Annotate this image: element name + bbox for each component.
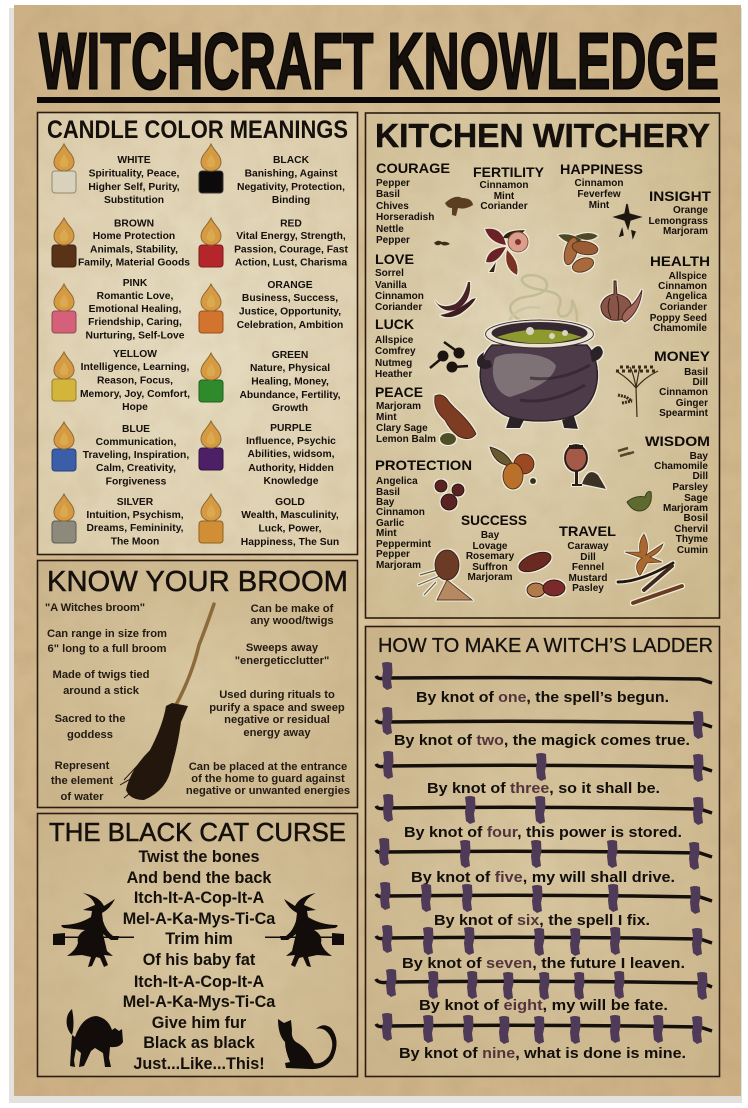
list: money: Dill <box>692 377 708 388</box>
text: broom right notes: Can be placed at the entrance <box>189 761 347 773</box>
text: curse verse: Just...Like...This! <box>133 1055 265 1073</box>
list: travel: Fennel <box>572 562 604 573</box>
list: luck: Comfrey <box>375 346 416 357</box>
text: curse verse: Itch-It-A-Cop-It-A <box>134 889 264 907</box>
text: broom right notes <box>186 603 350 797</box>
list: love: Cinnamon <box>375 291 424 302</box>
list: love: Coriander <box>375 302 422 313</box>
icon: ginger root <box>445 197 473 216</box>
list: travel <box>559 523 616 594</box>
list: happiness: HAPPINESS <box>560 161 643 177</box>
list: peace: Marjoram <box>376 401 421 412</box>
list: insight <box>649 188 711 237</box>
candle: white <box>52 144 76 193</box>
list: fertility <box>473 164 545 212</box>
ladder row 9 <box>376 1013 712 1062</box>
list: wisdom: Bay <box>690 451 708 462</box>
icon: small seeds wisdom <box>618 448 634 456</box>
list: success: Lovage <box>472 541 508 552</box>
text: curse verse: Twist the bones <box>138 848 260 866</box>
text: broom right notes: "energeticclutter" <box>235 655 329 667</box>
list: health: HEALTH <box>650 253 710 269</box>
list: protection: Garlic <box>376 518 405 529</box>
icon: vanilla and cinnamon sticks <box>618 563 682 603</box>
ladder row 3 <box>376 751 712 797</box>
text: green: Growth <box>272 403 308 414</box>
icon: dill umbel <box>616 367 658 417</box>
text: pink: Romantic Love, <box>97 291 173 302</box>
candle: red <box>199 218 223 267</box>
candle: yellow <box>52 352 76 401</box>
text: red: Passion, Courage, Fast <box>234 244 349 256</box>
ladder row 6 <box>376 882 712 929</box>
list: health: Coriander <box>660 302 707 313</box>
list: luck <box>375 316 416 380</box>
list: love: LOVE <box>375 251 414 267</box>
list: courage: Horseradish <box>376 212 434 223</box>
icon: almonds <box>558 233 599 275</box>
list: protection: Pepper <box>376 549 410 560</box>
list: wisdom: Chamomile <box>654 461 708 472</box>
list: success: Rosemary <box>466 551 515 562</box>
heading: kitchen witchery: KITCHEN WITCHERY <box>375 117 710 154</box>
list: love <box>375 251 424 313</box>
text: orange: ORANGE <box>267 280 313 291</box>
text: curse verse: Trim him <box>165 930 233 948</box>
text: silver: Dreams, Femininity, <box>86 523 184 534</box>
ladder row 8: By knot of eight, my will be fate. <box>419 997 668 1014</box>
list: protection: Basil <box>376 487 400 498</box>
list: peace: Mint <box>376 412 397 423</box>
list: happiness: Cinnamon <box>575 178 623 189</box>
list: wisdom: Cumin <box>677 545 708 556</box>
icon: hazelnuts <box>435 480 464 510</box>
list: fertility: FERTILITY <box>473 164 545 180</box>
list: insight: Marjoram <box>663 226 708 237</box>
panel: kitchen witchery <box>366 113 720 618</box>
list: wisdom: Bosil <box>684 513 708 524</box>
list: money: Ginger <box>676 398 708 409</box>
list: protection: Mint <box>376 528 397 539</box>
icon: witch on broom left <box>53 893 134 967</box>
list: protection: PROTECTION <box>375 457 472 473</box>
list: luck: Heather <box>375 369 412 380</box>
text: red: Action, Lust, Charisma <box>235 258 347 268</box>
ladder row 1 <box>376 662 712 706</box>
text: orange: Celebration, Ambition <box>237 320 343 331</box>
text: brown: Family, Material Goods <box>78 258 190 268</box>
ladder row 4: By knot of four, this power is stored. <box>404 824 682 841</box>
list: health: Allspice <box>669 271 707 282</box>
text: white: Substitution <box>104 195 164 206</box>
text: white: Higher Self, Purity, <box>88 182 180 193</box>
ladder row 5 <box>376 838 712 886</box>
text: green: GREEN <box>272 350 308 361</box>
list: courage: Basil <box>376 189 400 200</box>
icon: sitting black cat <box>278 1019 337 1069</box>
text: broom left notes: the element <box>51 775 113 787</box>
icon: witch on broom right <box>265 893 344 967</box>
list: health: Cinnamon <box>658 281 707 292</box>
list: peace: Clary Sage <box>376 423 428 434</box>
text: curse verse: Itch-It-A-Cop-It-A <box>134 973 264 991</box>
ladder row 2: By knot of two, the magick comes true. <box>394 732 690 749</box>
text: black: BLACK <box>273 155 310 166</box>
text: broom right notes: negative or unwanted energies <box>186 785 350 797</box>
list: travel: Caraway <box>567 541 609 552</box>
text: orange: Justice, Opportunity, <box>239 306 341 318</box>
text: pink: PINK <box>123 278 148 289</box>
list: wisdom: Dill <box>692 471 708 482</box>
list: money: Basil <box>684 367 708 378</box>
icon: garlic <box>601 281 642 322</box>
text: curse verse: Black as black <box>143 1034 256 1052</box>
text: curse verse: Mel-A-Ka-Mys-Ti-Ca <box>123 993 276 1011</box>
list: money: Spearmint <box>659 408 709 419</box>
list: travel: Mustard <box>569 573 607 584</box>
panel: know your broom <box>38 560 358 808</box>
list: health <box>650 253 710 334</box>
candle: purple <box>199 421 223 470</box>
list: fertility: Coriander <box>480 201 528 212</box>
list: travel: Dill <box>580 552 596 563</box>
icon: green leaf <box>627 492 651 511</box>
text: red: RED <box>280 218 302 230</box>
icon: small seeds <box>434 241 450 246</box>
list: peace <box>375 384 436 445</box>
icon: red beans <box>516 548 565 597</box>
list: protection: Peppermint <box>376 539 432 550</box>
text: broom right notes: negative or residual <box>224 714 330 726</box>
text: curse verse: Mel-A-Ka-Mys-Ti-Ca <box>123 910 276 928</box>
list: wisdom: Chervil <box>674 524 708 535</box>
ladder row 3: By knot of three, so it shall be. <box>427 780 660 797</box>
text: broom left notes: Sacred to the <box>55 713 125 725</box>
list: insight: INSIGHT <box>649 188 711 204</box>
list: travel: Pasley <box>572 583 604 594</box>
list: wisdom: Sage <box>684 493 708 504</box>
text: broom left notes: Can range in size from <box>47 628 167 640</box>
list: luck: Allspice <box>375 335 414 346</box>
list: happiness <box>560 161 643 211</box>
list: protection: Cinnamon <box>376 507 425 518</box>
list: protection <box>375 457 472 571</box>
list: success: Suffron <box>472 562 508 573</box>
list: protection: Angelica <box>376 476 418 487</box>
icon: arched black cat <box>67 1009 123 1067</box>
icon: coffee bean <box>440 433 456 445</box>
text: green: Abundance, Fertility, <box>239 390 341 401</box>
heading: how to make a witch's ladder: HOW TO MAKE A WITCH’S LADDER <box>378 634 713 657</box>
icon: poppy pod <box>565 445 606 489</box>
text: broom right notes: energy away <box>243 727 311 739</box>
list: health: Poppy Seed <box>650 313 707 324</box>
text: purple: Authority, Hidden <box>248 463 334 474</box>
text: blue: Calm, Creativity, <box>96 463 176 474</box>
icon: flowering herb <box>485 229 528 275</box>
text: purple: Knowledge <box>264 476 319 487</box>
text: broom left notes <box>45 602 167 803</box>
panel: the black cat curse <box>38 814 358 1076</box>
candle: brown <box>52 218 76 267</box>
text: white: WHITE <box>117 155 151 166</box>
text: broom left notes: "A Witches broom" <box>45 602 145 614</box>
text: broom right notes: Can be make of <box>251 603 334 615</box>
list: fertility: Cinnamon <box>480 180 528 191</box>
list: wisdom: Thyme <box>676 534 708 545</box>
candle: gold <box>199 494 223 543</box>
heading: candle color meanings: CANDLE COLOR MEANINGS <box>47 116 348 144</box>
text: broom right notes: Sweeps away <box>246 642 319 654</box>
text: silver: The Moon <box>111 536 159 548</box>
list: money: MONEY <box>654 348 711 364</box>
list: insight: Lemongrass <box>649 216 708 227</box>
icon: cauldron with steam <box>477 275 603 429</box>
text: yellow: Reason, Focus, <box>97 376 173 386</box>
text: blue: Forgiveness <box>106 476 167 488</box>
text: broom left notes: of water <box>61 791 104 803</box>
text: white: Spirituality, Peace, <box>89 168 180 180</box>
text: gold: GOLD <box>275 497 305 508</box>
list: wisdom: Parsley <box>672 482 708 493</box>
list: money <box>654 348 711 419</box>
ladder row 5: By knot of five, my will shall drive. <box>411 869 675 886</box>
text: purple: Abilities, widsom, <box>248 449 335 460</box>
icon: star flower <box>625 534 663 576</box>
list: wisdom: Marjoram <box>663 503 708 514</box>
text: broom left notes: 6" long to a full broom <box>47 643 167 655</box>
list: love: Vanilla <box>375 280 407 291</box>
text: gold: Wealth, Masculinity, <box>241 510 339 521</box>
text: pink: Friendship, Caring, <box>88 317 182 328</box>
list: courage <box>376 160 450 246</box>
list: happiness: Feverfew <box>577 189 621 200</box>
text: broom left notes: around a stick <box>63 685 140 697</box>
text: black: Banishing, Against <box>245 168 338 180</box>
list: success: Marjoram <box>467 572 513 583</box>
list: success: Bay <box>481 530 500 541</box>
ladder row 9: By knot of nine, what is done is mine. <box>399 1045 686 1062</box>
icon: cloves <box>430 342 468 372</box>
candle: silver <box>52 494 76 543</box>
list: luck: Nutmeg <box>375 358 412 369</box>
text: broom right notes: Used during rituals to <box>219 689 335 701</box>
list: insight: Orange <box>673 205 708 216</box>
text: gold: Happiness, The Sun <box>241 537 339 548</box>
text: broom left notes: Represent <box>55 760 110 772</box>
candle: orange <box>199 284 223 333</box>
ladder row 2 <box>376 707 712 749</box>
list: health: Angelica <box>665 291 707 302</box>
list: peace: Lemon Balm <box>376 434 436 445</box>
icon: pine cone <box>418 550 472 600</box>
ladder row 8 <box>376 969 712 1014</box>
heading: know your broom: KNOW YOUR BROOM <box>47 566 348 598</box>
text: green: Nature, Physical <box>250 363 330 374</box>
text: yellow: Intelligence, Learning, <box>81 362 189 373</box>
ladder row 6: By knot of six, the spell I fix. <box>434 912 650 929</box>
title rule <box>37 97 720 103</box>
text: blue: Traveling, Inspiration, <box>83 450 189 461</box>
list: health: Chamomile <box>653 323 707 334</box>
text: silver: SILVER <box>117 497 154 508</box>
text: gold: Luck, Power, <box>259 524 322 534</box>
text: brown: Home Protection <box>93 231 175 242</box>
panel: how to make a witch's ladder <box>366 626 720 1076</box>
list: courage: Pepper <box>376 235 410 246</box>
icon: peanut pod <box>435 395 476 439</box>
candle: blue <box>52 422 76 471</box>
icon: star anise <box>615 204 640 237</box>
text: broom left notes: Made of twigs tied <box>53 669 150 681</box>
heading: the black cat curse: THE BLACK CAT CURSE <box>49 817 346 847</box>
list: protection: Marjoram <box>376 560 421 571</box>
text: curse verse: And bend the back <box>127 869 272 887</box>
list: courage: COURAGE <box>376 160 450 176</box>
icon: chili peppers <box>434 282 476 317</box>
text: orange: Business, Success, <box>242 293 338 304</box>
text: curse verse: Give him fur <box>152 1014 247 1032</box>
text: broom right notes: purify a space and sweep <box>209 702 345 714</box>
list: courage: Chives <box>376 201 409 212</box>
text: purple: Influence, Psychic <box>246 436 336 447</box>
text: brown: Animals, Stability, <box>90 244 178 256</box>
ladder row 7 <box>376 925 712 972</box>
text: blue: Communication, <box>96 437 176 448</box>
candle: pink <box>52 284 76 333</box>
list: money: Cinnamon <box>659 387 708 398</box>
candle: green <box>199 353 223 402</box>
ladder row 4 <box>376 794 712 841</box>
text: curse verse: Of his baby fat <box>143 951 256 969</box>
text: green: Healing, Money, <box>251 376 329 388</box>
list: courage: Pepper <box>376 178 410 189</box>
text: yellow: YELLOW <box>113 349 157 360</box>
list: protection: Bay <box>376 497 395 508</box>
text: broom right notes: of the home to guard against <box>191 773 345 785</box>
text: purple: PURPLE <box>270 423 312 434</box>
list: love: Sorrel <box>375 268 404 279</box>
text: broom right notes: any wood/twigs <box>250 615 334 627</box>
icon: nutmeg and leaf <box>490 447 536 489</box>
candle: black <box>199 144 223 193</box>
list: wisdom <box>645 433 710 556</box>
text: brown: BROWN <box>114 218 154 230</box>
ladder row 1: By knot of one, the spell’s begun. <box>416 689 669 706</box>
text: red: Vital Energy, Strength, <box>236 231 346 242</box>
icon: broom <box>120 604 214 800</box>
text: black: Negativity, Protection, <box>237 182 345 193</box>
ladder row 7: By knot of seven, the future I leaven. <box>402 955 685 972</box>
list: happiness: Mint <box>589 200 610 211</box>
text: black: Binding <box>272 195 310 206</box>
text: pink: Emotional Healing, <box>89 304 181 315</box>
list: courage: Nettle <box>376 224 404 235</box>
text: blue: BLUE <box>122 424 150 435</box>
list: luck: LUCK <box>375 316 414 332</box>
text: yellow: Memory, Joy, Comfort, <box>80 389 190 400</box>
list: wisdom: WISDOM <box>645 433 710 449</box>
list: fertility: Mint <box>494 191 515 202</box>
text: yellow: Hope <box>122 402 148 413</box>
text: broom left notes: goddess <box>67 729 113 741</box>
text: pink: Nurturing, Self-Love <box>86 330 185 342</box>
list: success: SUCCESS <box>461 512 527 528</box>
list: success <box>461 512 527 583</box>
list: travel: TRAVEL <box>559 523 616 539</box>
text: silver: Intuition, Psychism, <box>86 510 184 521</box>
list: peace: PEACE <box>375 384 423 400</box>
panel: candle color meanings <box>38 112 358 554</box>
